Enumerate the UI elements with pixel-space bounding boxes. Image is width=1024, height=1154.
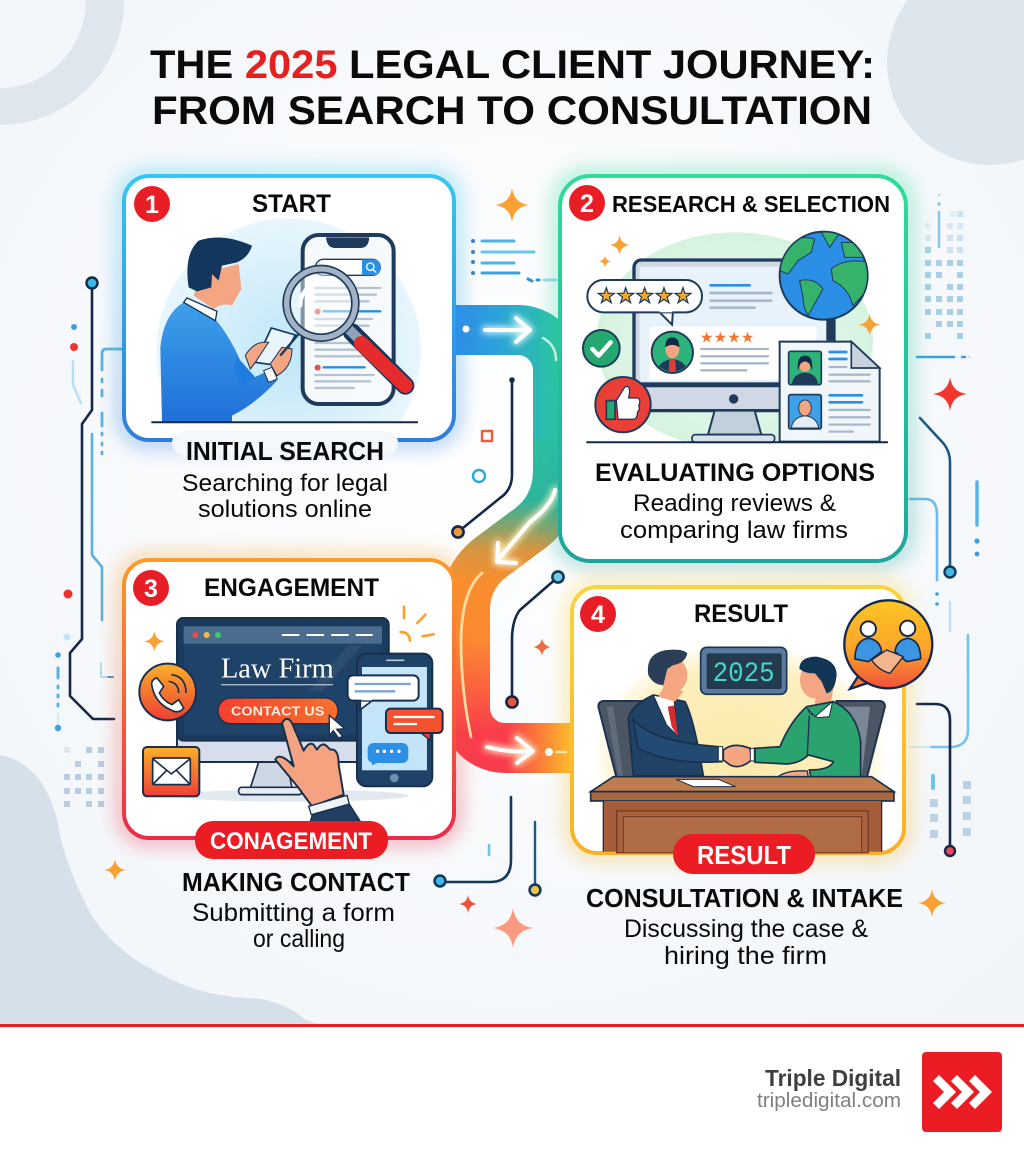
brand text: Triple Digital bbox=[765, 1065, 901, 1091]
badge 3 bbox=[133, 570, 169, 606]
circuit decoration: left bbox=[55, 278, 122, 731]
title: THE 2025 LEGAL CLIENT JOURNEY: bbox=[150, 43, 875, 87]
circuit decoration: right bbox=[910, 194, 980, 856]
pixel grid: lower left bbox=[64, 747, 104, 807]
sparkle: orange lower right bbox=[918, 889, 946, 917]
illustration: law firm website contact bbox=[139, 607, 443, 821]
panel: step 3 engagement bbox=[124, 560, 454, 859]
illustration: consultation handshake bbox=[591, 600, 932, 873]
label backdrop: initial search bbox=[172, 431, 398, 455]
logo bbox=[922, 1052, 1002, 1132]
decorative blob: top right bbox=[887, 0, 1024, 165]
footer bbox=[0, 1024, 1024, 1154]
illustration: person searching on phone bbox=[151, 218, 421, 424]
sparkle: red right bbox=[933, 377, 967, 411]
text block: making contact: or calling bbox=[253, 925, 345, 953]
text block: evaluating options: EVALUATING OPTIONS bbox=[595, 459, 875, 487]
text block: consultation and intake bbox=[586, 885, 903, 970]
brand text bbox=[757, 1065, 901, 1112]
text block: evaluating options: comparing law firms bbox=[620, 517, 848, 544]
panel: step 4 result bbox=[572, 587, 932, 874]
title: FROM SEARCH TO CONSULTATION bbox=[152, 89, 872, 133]
panel: step 2 research bbox=[560, 176, 906, 561]
pill label: result: RESULT bbox=[697, 840, 791, 870]
text block: initial search: solutions online bbox=[198, 496, 372, 523]
badge 1: 1 bbox=[145, 191, 159, 219]
badge 4 bbox=[580, 596, 616, 632]
text block: making contact: MAKING CONTACT bbox=[182, 867, 410, 897]
connector ribbon between steps bbox=[440, 330, 582, 748]
title bbox=[150, 43, 875, 133]
decorative blob: bottom left bbox=[0, 755, 318, 1024]
decorative blob: top left bbox=[0, 0, 124, 125]
pill label: conagement bbox=[195, 821, 388, 859]
illustration: comparing reviews bbox=[583, 231, 888, 449]
badge 3: 3 bbox=[144, 575, 158, 603]
text block: consultation and intake: Discussing the case & bbox=[624, 915, 868, 943]
sparkle: pink lower center bbox=[493, 908, 533, 948]
text block: initial search: Searching for legal bbox=[182, 470, 388, 497]
text block: making contact: Submitting a form bbox=[192, 899, 395, 927]
badge 2: 2 bbox=[580, 190, 594, 218]
text block: initial search bbox=[182, 436, 388, 523]
brand text: tripledigital.com bbox=[757, 1090, 901, 1112]
badge 2 bbox=[569, 185, 605, 221]
text block: initial search: INITIAL SEARCH bbox=[186, 436, 384, 466]
text block: consultation and intake: CONSULTATION & INTAKE bbox=[586, 885, 903, 913]
card glows bbox=[122, 174, 908, 855]
sparkle: red lower center bbox=[459, 895, 477, 913]
text block: making contact bbox=[182, 867, 410, 953]
illustration: consultation handshake: 2025 bbox=[713, 659, 775, 690]
arrow: step 2 to 3 bbox=[461, 490, 555, 737]
badge 1 bbox=[134, 186, 170, 222]
arrow: step 1 to 2 bbox=[464, 318, 556, 360]
heading: research and selection: RESEARCH & SELECTION bbox=[612, 191, 890, 217]
list decoration: top center bbox=[471, 239, 556, 281]
illustration: law firm website contact: Law Firm bbox=[221, 653, 334, 684]
heading: engagement: ENGAGEMENT bbox=[204, 574, 379, 602]
pixel grid: lower right bbox=[930, 781, 971, 838]
heading: result: RESULT bbox=[694, 600, 788, 628]
arrow: step 3 to 4 bbox=[487, 738, 566, 763]
illustration: law firm website contact: CONTACT US bbox=[231, 704, 324, 719]
text block: evaluating options: Reading reviews & bbox=[633, 490, 836, 517]
sparkle: orange lower left bbox=[104, 859, 126, 881]
panel: step 1 start bbox=[122, 174, 456, 442]
connector detail: circuit lines in gaps bbox=[435, 377, 564, 895]
sparkle: top center bbox=[495, 188, 529, 222]
text block: consultation and intake: hiring the firm bbox=[664, 942, 827, 970]
text block: evaluating options bbox=[595, 459, 875, 544]
badge 4: 4 bbox=[591, 601, 605, 629]
pill label: conagement: CONAGEMENT bbox=[210, 828, 372, 855]
pixel grid: upper right bbox=[925, 211, 963, 339]
sparkle: orange middle bbox=[533, 638, 551, 656]
pill label: result bbox=[673, 834, 815, 874]
heading: start: START bbox=[252, 190, 331, 218]
